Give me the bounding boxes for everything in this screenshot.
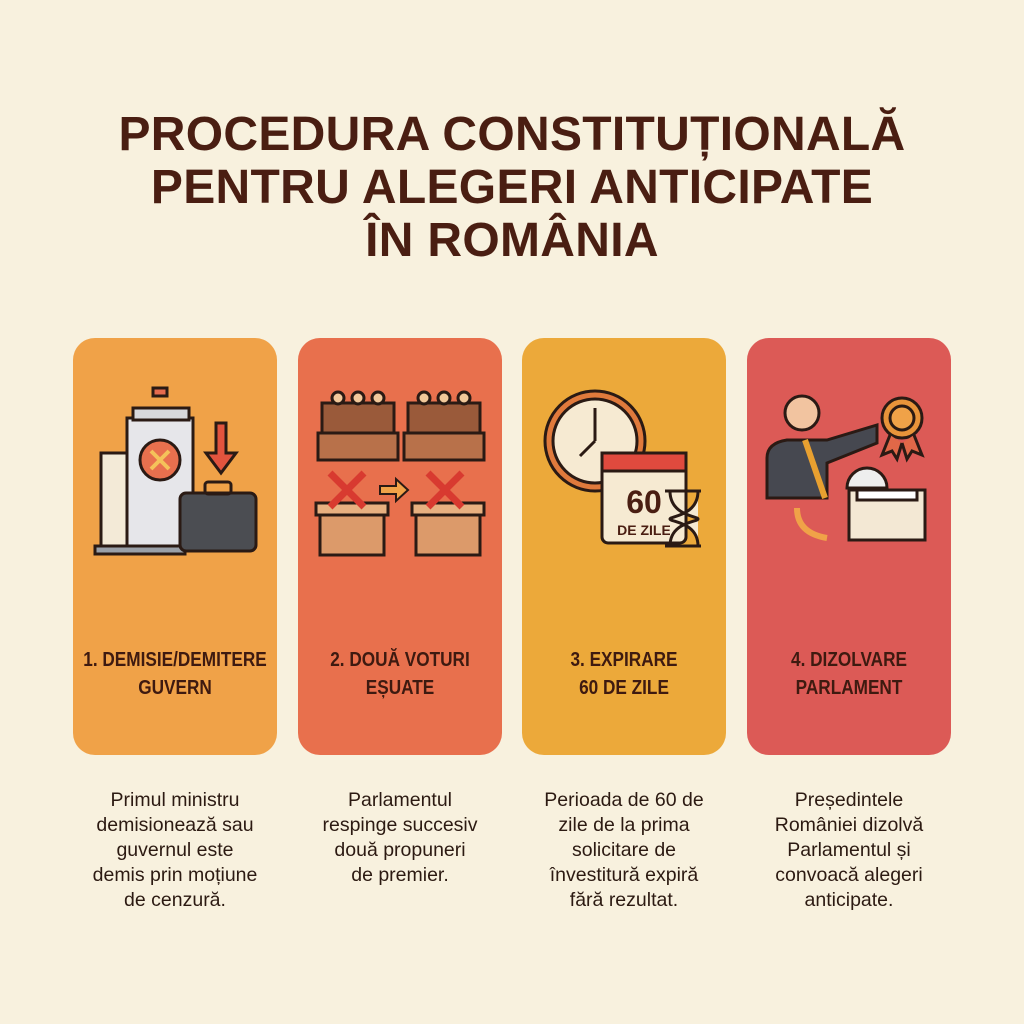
text: step 3 description [544, 789, 704, 911]
arrow notch [522, 868, 538, 898]
text: step 4 description: României dizolvă [775, 814, 923, 836]
panel: step 2 [298, 338, 502, 755]
title: PROCEDURA CONSTITUȚIONALĂ [118, 108, 906, 161]
label: GUVERN [138, 677, 212, 699]
text: step 1 description: Primul ministru [111, 789, 239, 811]
panel: step 3 [522, 338, 726, 755]
title: ÎN ROMÂNIA [365, 214, 659, 267]
text: step 2 description: două propuneri [334, 839, 466, 861]
text: step 4 description [775, 789, 924, 911]
title: PENTRU ALEGERI ANTICIPATE [151, 161, 873, 214]
title [118, 107, 906, 267]
text: step 3 description: învestitură expiră [550, 864, 698, 886]
text: step 1 description: de cenzură. [124, 889, 226, 911]
label [83, 649, 267, 699]
text: step 2 description: de premier. [351, 864, 449, 886]
icon: president dissolving parliament [766, 394, 926, 542]
panel: step 4 [747, 338, 951, 755]
label: 3. EXPIRARE [570, 649, 678, 671]
icon: building with briefcase [94, 386, 258, 556]
text: step 3 description: fără rezultat. [570, 889, 678, 911]
text: step 3 description: zile de la prima [558, 814, 690, 836]
text: step 3 description: solicitare de [572, 839, 676, 861]
label [791, 649, 907, 699]
arrow notch [747, 868, 763, 898]
label: PARLAMENT [796, 677, 902, 699]
panel: step 1 [73, 338, 277, 755]
text: step 2 description [322, 789, 478, 886]
text: step 2 description: respinge succesiv [322, 814, 478, 836]
text: step 2 description: Parlamentul [348, 789, 452, 811]
text: step 4 description: anticipate. [805, 889, 893, 911]
text: step 1 description: guvernul este [116, 839, 234, 861]
text: step 1 description: demisionează sau [96, 814, 254, 836]
text: step 4 description: convoacă alegeri [775, 864, 923, 886]
text: step 1 description [93, 789, 257, 911]
label: EȘUATE [366, 677, 434, 699]
icon: clock, calendar, hourglass: 60 [626, 484, 662, 520]
arrow notch [298, 868, 314, 898]
label [330, 648, 470, 699]
text: step 3 description: Perioada de 60 de [544, 789, 704, 811]
label: 60 DE ZILE [579, 677, 669, 699]
label: 1. DEMISIE/DEMITERE [83, 649, 267, 671]
text: step 4 description: Președintele [795, 789, 903, 811]
label: 4. DIZOLVARE [791, 649, 907, 671]
label [570, 649, 678, 699]
icon: clock, calendar, hourglass [544, 390, 701, 548]
text: step 4 description: Parlamentul și [787, 839, 911, 861]
label: 2. DOUĂ VOTURI [330, 649, 470, 671]
icon: parliament and failed votes [314, 390, 486, 556]
text: step 1 description: demis prin moțiune [93, 864, 257, 886]
icon: clock, calendar, hourglass: DE ZILE [617, 522, 671, 538]
